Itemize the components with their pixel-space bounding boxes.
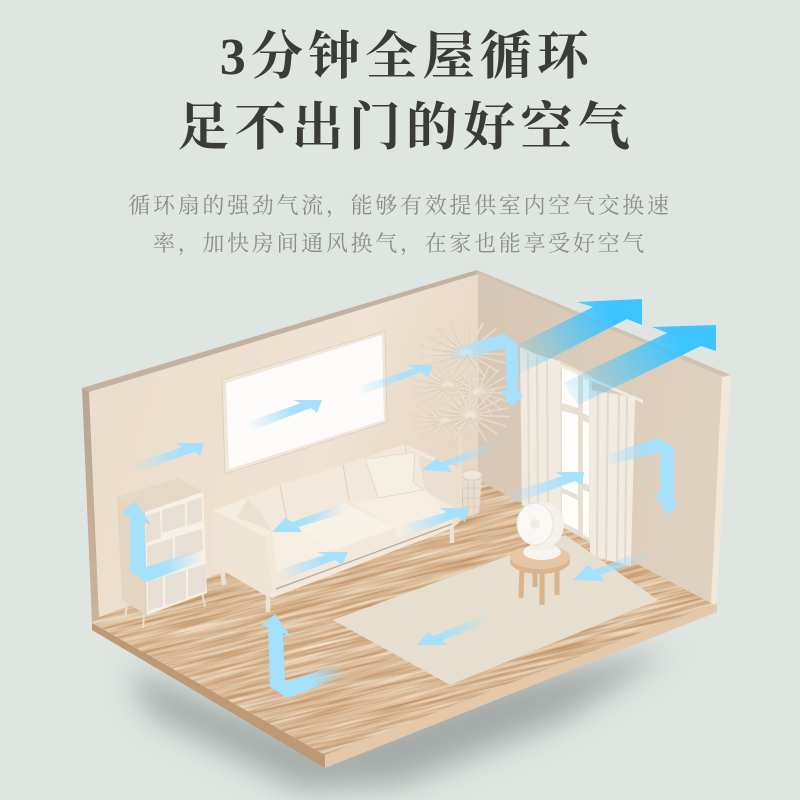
curtain rod xyxy=(520,347,643,403)
right wall cut edge xyxy=(711,375,731,605)
arrow: floor bent xyxy=(262,614,347,698)
plant xyxy=(412,320,513,516)
arrow: left wall xyxy=(130,443,204,472)
title line 2: 足不出门的好空气 xyxy=(177,100,635,157)
shelf side xyxy=(117,497,147,615)
arrow: big outflow right xyxy=(563,325,716,405)
arrow: floor right xyxy=(573,550,652,581)
wood floor xyxy=(92,482,717,755)
left wall xyxy=(89,274,478,617)
arrow: toward sofa arm xyxy=(422,441,500,472)
rug xyxy=(333,535,658,685)
arrow: sofa back left xyxy=(272,503,350,532)
circulation fan xyxy=(517,502,564,560)
floating shadow xyxy=(128,650,672,790)
sofa back seams xyxy=(280,444,409,520)
sofa silhouette xyxy=(213,444,462,598)
title line 1: 3分钟全屋循环 xyxy=(220,29,594,86)
sofa xyxy=(213,444,462,612)
floor slab xyxy=(92,603,717,768)
arrow: window xyxy=(503,472,584,505)
pillow left xyxy=(237,498,272,532)
shelf top xyxy=(117,478,203,512)
table top xyxy=(510,548,570,574)
pillow right xyxy=(365,452,423,498)
sofa legs xyxy=(222,525,452,612)
left arm xyxy=(213,510,273,595)
subtitle line 1: 循环扇的强劲气流，能够有效提供室内空气交换速 xyxy=(128,193,672,218)
side table xyxy=(510,545,570,605)
picture frame xyxy=(222,331,387,474)
arrow: right wall bent xyxy=(603,438,678,515)
shelf front xyxy=(145,492,207,615)
rail gap xyxy=(276,524,452,589)
right wall xyxy=(478,274,724,603)
bookshelf xyxy=(117,478,207,628)
arrow: plant bent down xyxy=(443,334,523,407)
arrow: sofa right seat xyxy=(400,508,468,537)
arrow: shelf bent xyxy=(122,501,204,582)
shelf cells xyxy=(146,497,206,611)
seat cushions xyxy=(272,528,333,572)
shelf legs xyxy=(125,592,205,628)
window xyxy=(558,360,592,543)
wall top edge right xyxy=(477,270,731,377)
table legs xyxy=(521,565,557,605)
wall top edge left xyxy=(82,270,478,392)
arrow: big outflow top xyxy=(517,299,642,375)
arrow: sofa seat xyxy=(277,552,348,580)
arrow: rug xyxy=(417,614,492,645)
right curtain xyxy=(589,390,635,566)
arrow: picture xyxy=(245,400,322,430)
plant basket xyxy=(462,470,482,516)
right arm xyxy=(418,455,462,528)
room illustration xyxy=(82,270,731,800)
arrow: wall to plant xyxy=(357,365,433,395)
left curtain xyxy=(520,350,561,530)
subtitle line 2: 率，加快房间通风换气，在家也能享受好空气 xyxy=(153,231,647,256)
wall left cut edge xyxy=(82,388,99,623)
